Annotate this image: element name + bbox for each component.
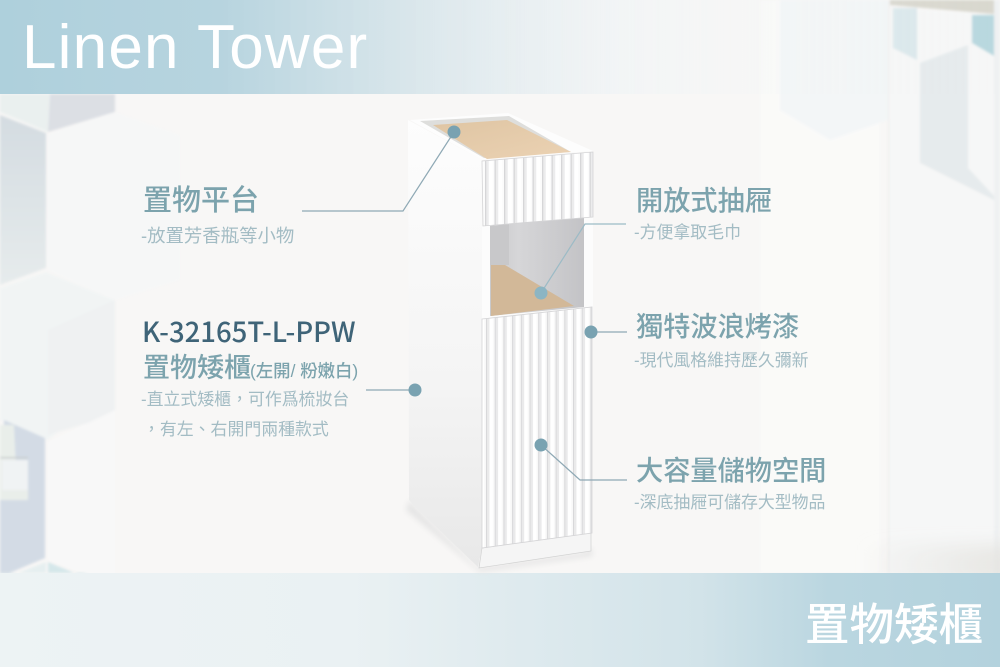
callout: large storage: 大容量儲物空間 (636, 455, 826, 486)
cabinet illustration (406, 113, 593, 572)
compartment plywood floor (491, 265, 574, 316)
callout: model and cabinet description: K-32165T-L-PPW (142, 310, 356, 350)
cabinet plinth (479, 533, 591, 568)
callout: model and cabinet description: ，有左、右開門兩種款式 (143, 420, 329, 439)
leader: platform (302, 126, 460, 211)
top title band (0, 0, 1000, 94)
callout: open drawer: -方便拿取毛巾 (634, 222, 741, 242)
callout: platform: 置物平台 (143, 184, 259, 217)
open compartment frame (482, 217, 593, 320)
leader: wave finish (584, 326, 627, 338)
cabinet side panel (408, 120, 482, 567)
callout: wave finish: -現代風格維持歷久彌新 (634, 351, 809, 370)
bottom caption: 置物矮櫃 (805, 601, 983, 650)
callout: model and cabinet description: -直立式矮櫃，可作爲梳妝台 (141, 390, 349, 409)
callout: large storage (634, 455, 826, 512)
callout: open drawer: 開放式抽屜 (636, 185, 772, 216)
title: Linen Tower (22, 13, 368, 82)
bottom band (0, 573, 1000, 667)
callout: large storage: -深底抽屜可儲存大型物品 (634, 493, 825, 512)
leader: open drawer (534, 224, 626, 300)
callout: model and cabinet description (141, 310, 358, 439)
open drawer (482, 152, 593, 226)
callout: wave finish (634, 311, 809, 370)
compartment interior (490, 217, 584, 316)
callout: wave finish: 獨特波浪烤漆 (636, 311, 799, 342)
cabinet shadow (406, 500, 592, 572)
cabinet door (482, 307, 592, 548)
callout: model and cabinet description: (左開/ 粉嫩白) (250, 361, 358, 381)
leader: cabinet (366, 384, 422, 396)
leader: storage (534, 438, 627, 480)
plywood top (433, 120, 571, 159)
callout: platform (141, 184, 294, 246)
callout: open drawer (634, 185, 772, 242)
callout: platform: -放置芳香瓶等小物 (141, 225, 294, 246)
cabinet top frame (410, 113, 593, 160)
callout: model and cabinet description: 置物矮櫃 (143, 353, 251, 383)
